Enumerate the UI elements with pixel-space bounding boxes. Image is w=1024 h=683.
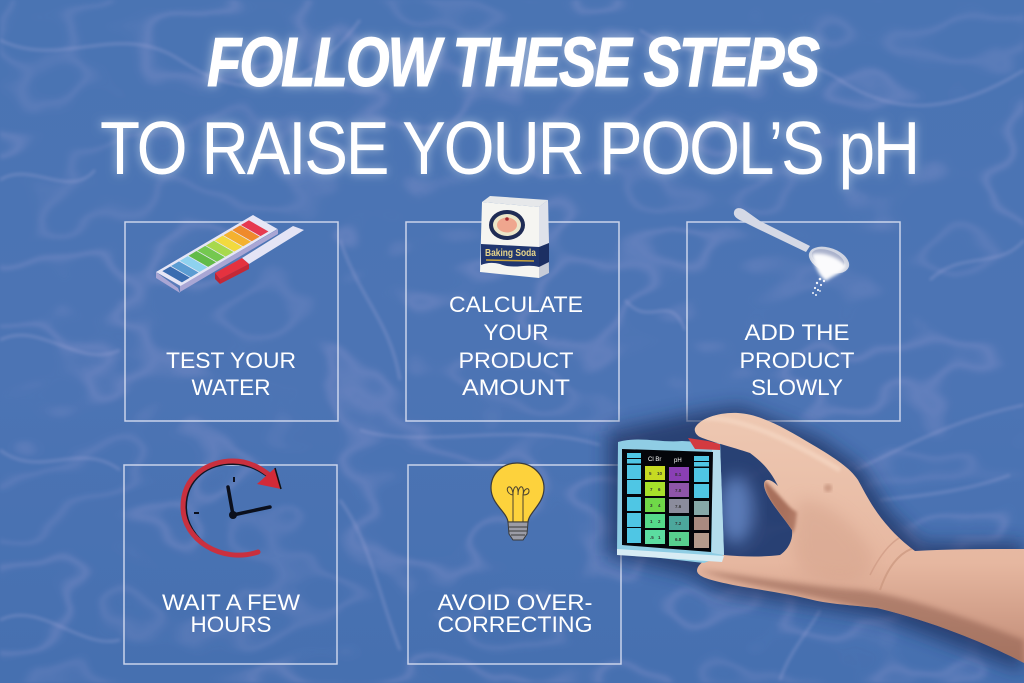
colour chart: 7.2 bbox=[675, 521, 682, 526]
icon: clock with arrow bbox=[183, 461, 281, 556]
label: TEST YOUR bbox=[166, 348, 296, 373]
colour chart: pH bbox=[674, 458, 682, 464]
icon: pH test strip bbox=[156, 215, 304, 293]
panel: calculate your product amount bbox=[406, 196, 619, 421]
title line 2: TO RAISE YOUR POOL’S pH bbox=[100, 106, 918, 190]
colour chart: 7.8 bbox=[675, 488, 682, 493]
colour chart: 3 bbox=[650, 503, 653, 508]
colour chart: 10 bbox=[657, 471, 663, 476]
title bbox=[100, 23, 918, 190]
colour chart: 4 bbox=[658, 503, 661, 508]
label: WAIT A FEW bbox=[162, 590, 301, 615]
label bbox=[449, 292, 583, 400]
label: CORRECTING bbox=[438, 612, 592, 637]
icon: spoon with powder bbox=[734, 208, 853, 296]
label: AVOID OVER- bbox=[438, 590, 592, 615]
label bbox=[438, 590, 592, 637]
label: WATER bbox=[192, 375, 270, 400]
icon: light bulb bbox=[491, 463, 544, 540]
colour chart: 6.8 bbox=[675, 537, 682, 542]
label: HOURS bbox=[190, 612, 272, 637]
colour chart: 2 bbox=[658, 519, 661, 524]
colour chart: 1 bbox=[658, 535, 661, 540]
pH test kit bbox=[617, 438, 724, 563]
label: ADD THE bbox=[744, 320, 850, 345]
title line 1: FOLLOW THESE STEPS bbox=[207, 23, 819, 101]
colour chart: .5 bbox=[650, 535, 654, 540]
icon: baking soda box: Baking Soda bbox=[485, 248, 536, 259]
colour chart: 7.6 bbox=[675, 504, 682, 509]
colour chart: Cl Br bbox=[648, 457, 661, 463]
colour chart: 6 bbox=[658, 487, 661, 492]
label bbox=[166, 348, 296, 400]
panel: wait a few hours bbox=[124, 461, 337, 664]
photo: hand holding pH tester bbox=[608, 406, 1024, 672]
panel: test your water bbox=[125, 215, 338, 421]
panel: avoid over-correcting bbox=[408, 463, 621, 664]
label: PRODUCT bbox=[740, 348, 855, 373]
colour chart: 7 bbox=[650, 487, 653, 492]
colour chart bbox=[627, 453, 709, 548]
label bbox=[740, 320, 855, 400]
colour chart: 5 bbox=[649, 471, 652, 476]
panel: add the product slowly bbox=[687, 208, 900, 421]
label: AMOUNT bbox=[462, 375, 570, 400]
lighter water seen between thumb and finger bbox=[719, 476, 753, 544]
colour chart: 1 bbox=[650, 519, 653, 524]
hand bbox=[695, 413, 1024, 668]
icon: baking soda box bbox=[480, 196, 549, 278]
colour chart: 8.1 bbox=[675, 472, 682, 477]
label: PRODUCT bbox=[458, 348, 574, 373]
label: CALCULATE bbox=[449, 292, 583, 317]
dark cutout shadow bbox=[608, 406, 1024, 672]
label bbox=[162, 590, 301, 637]
label: SLOWLY bbox=[751, 375, 843, 400]
label: YOUR bbox=[483, 320, 549, 345]
